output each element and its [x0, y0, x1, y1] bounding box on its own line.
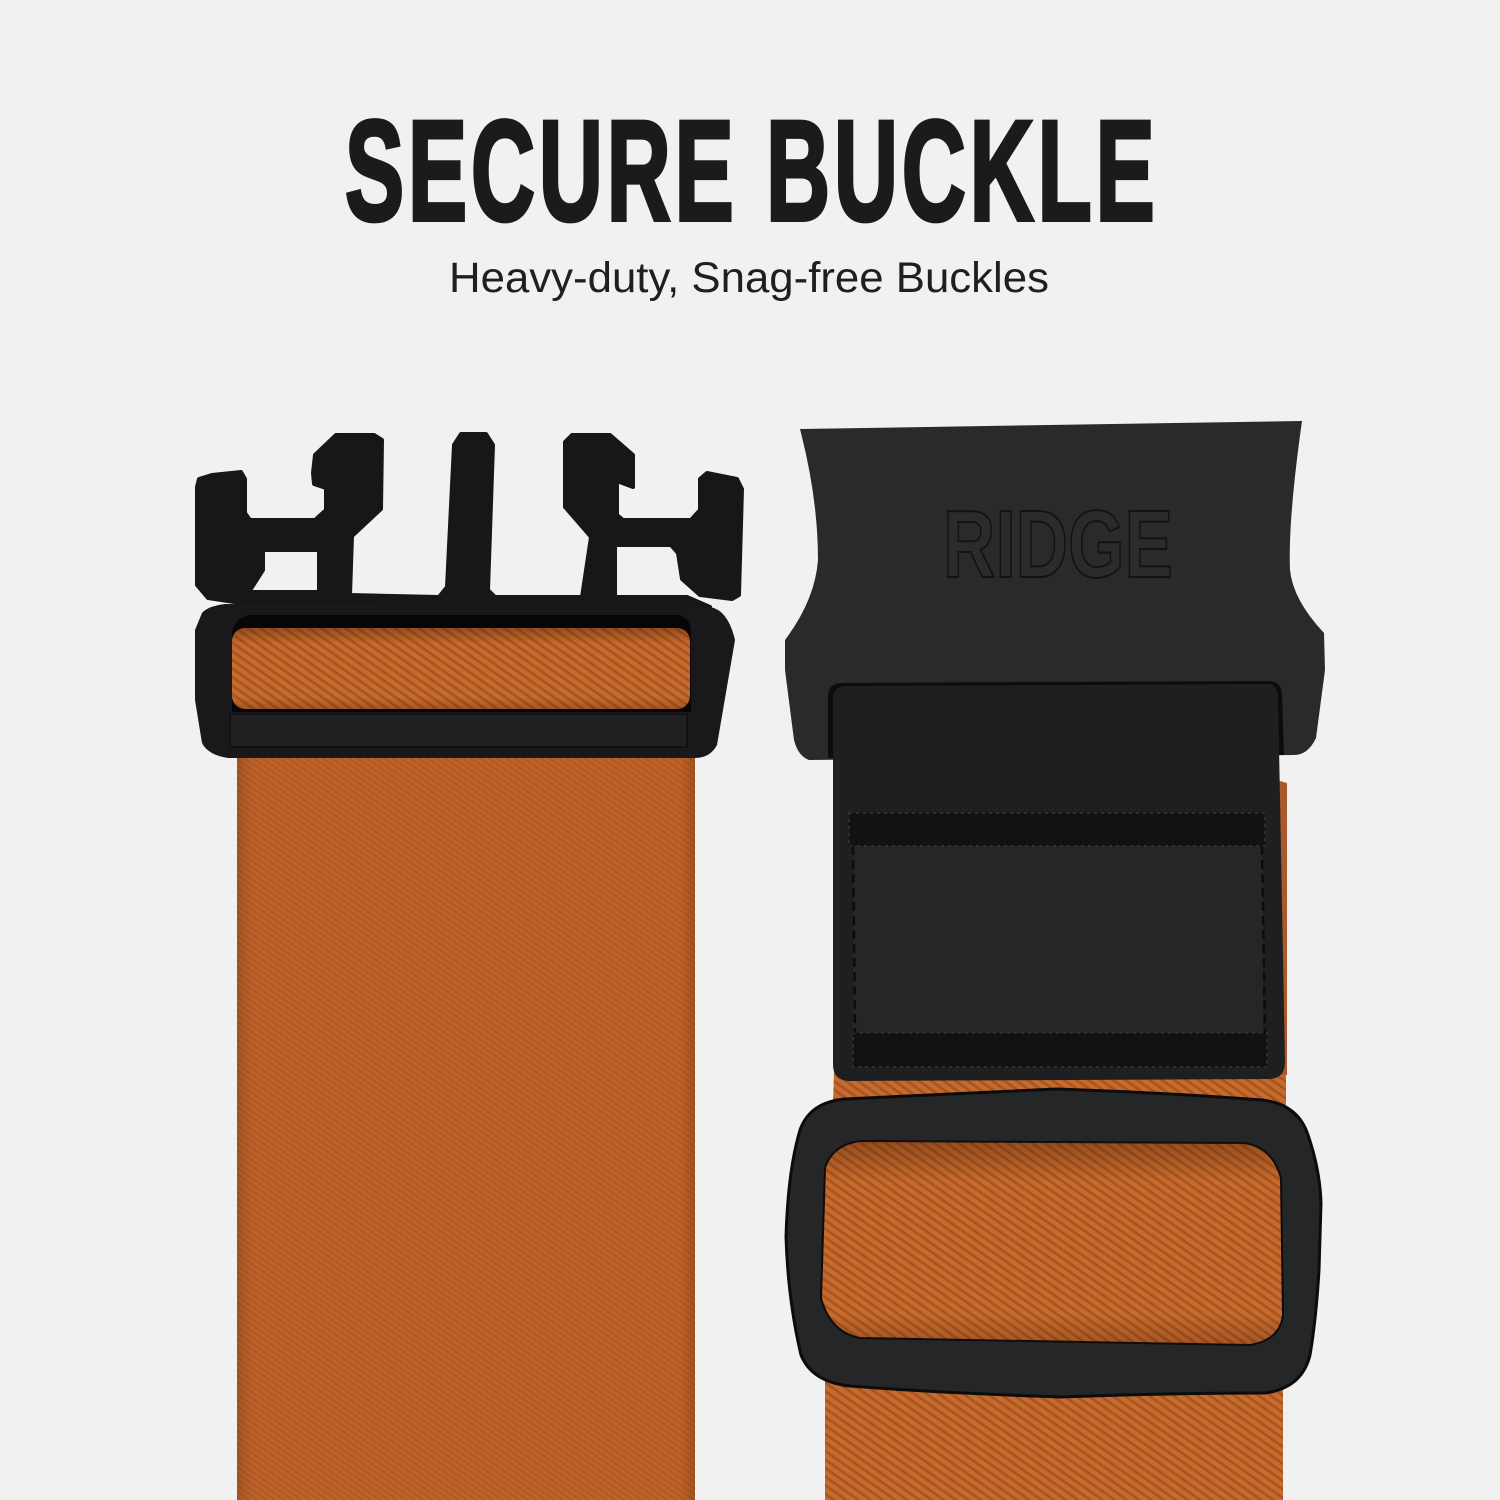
lower bar [230, 714, 687, 747]
embossed logo: RIDGE [943, 491, 1173, 598]
orange strap: left [237, 750, 695, 1500]
right strap with female buckle [785, 421, 1325, 1500]
subtitle: Heavy-duty, Snag-free Buckles [449, 254, 1049, 302]
upper stitching [849, 813, 1265, 846]
black buckle housing [785, 421, 1325, 760]
strap sliver [1276, 780, 1287, 1075]
lower stitching [853, 1033, 1267, 1067]
side stitching [853, 846, 1265, 1033]
title: SECURE BUCKLE [345, 91, 1155, 251]
buckle prongs [197, 434, 742, 612]
frame opening [232, 615, 691, 712]
left strap with male buckle [195, 434, 742, 1500]
rolled strap: right [821, 1141, 1283, 1345]
buckle frame: left [195, 604, 735, 758]
orange strap: right [825, 1070, 1286, 1500]
black webbing tab [833, 684, 1285, 1081]
rolled strap: left [232, 628, 690, 709]
housing slot [828, 681, 1284, 758]
fabric patch [853, 845, 1263, 1035]
slider frame [786, 1089, 1321, 1397]
